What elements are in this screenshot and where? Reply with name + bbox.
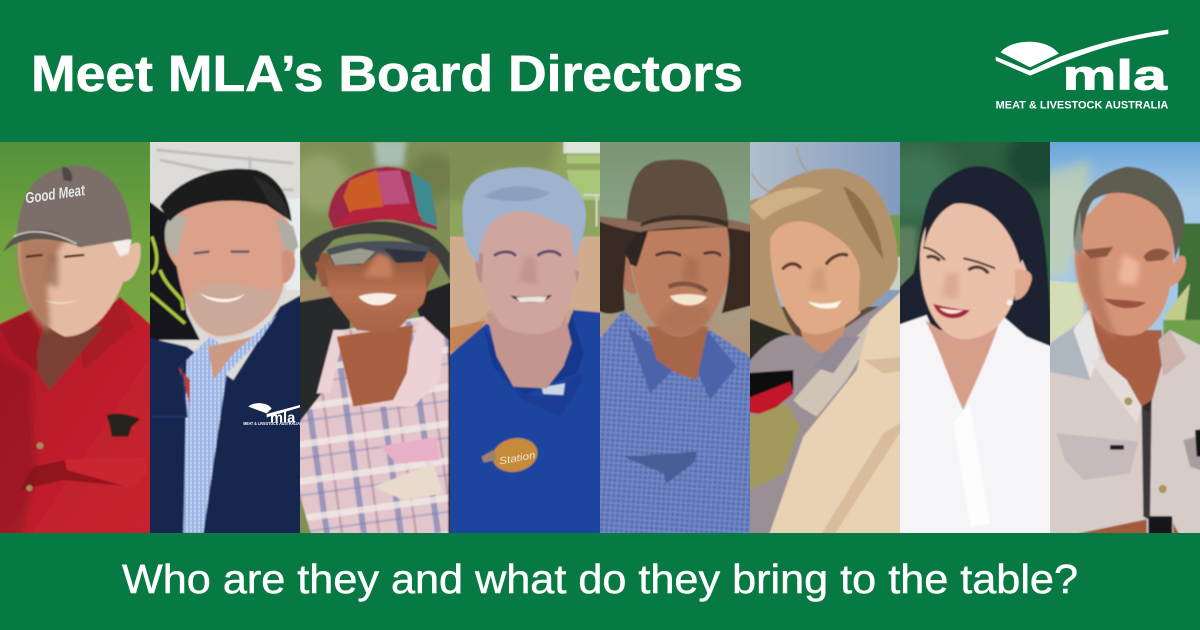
MLA logo [996,30,1168,111]
portrait 1: man in grey cap and red shirt [0,142,150,533]
MLA logo: mla [1063,51,1168,98]
vest logo: mla [270,411,296,427]
portrait 3: woman in colourful hat and sunglasses [300,142,450,533]
portrait 6: woman with wind-blown hair, beige coat and scarf [750,142,900,533]
vest logo [243,403,300,427]
title: Meet MLA’s Board Directors [31,45,743,102]
cap lettering: Good Meat [24,182,87,207]
portrait 2: man in black cap and navy MLA vest [150,142,300,533]
MLA logo: MEAT & LIVESTOCK AUSTRALIA [996,99,1168,111]
footer band [0,533,1200,630]
portrait 8: grey-haired man in khaki shirt [1050,142,1200,533]
header band [0,0,1200,142]
portrait 7: dark-haired woman in white shirt [900,142,1050,533]
sweater badge: Station [498,450,537,467]
photo strip [0,130,1200,545]
subtitle: Who are they and what do they bring to the table? [122,556,1078,602]
portrait 5: man in brown akubra hat and blue check shirt [600,142,750,533]
portrait 4: grey-haired man in blue sweater [450,142,600,533]
